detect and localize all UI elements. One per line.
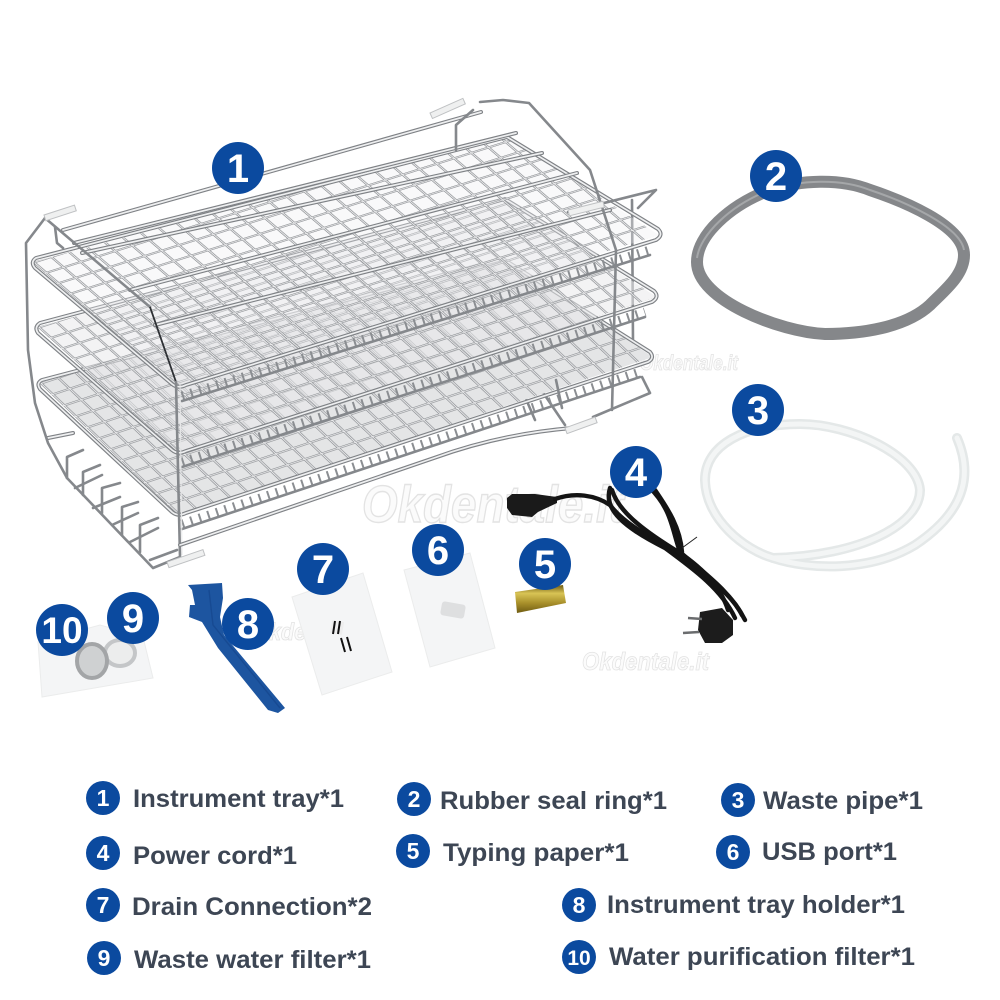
- legend item 4: Power cord*1: [133, 842, 297, 870]
- badge 8: 8: [237, 603, 259, 647]
- legend item 9: Waste water filter*1: [134, 946, 371, 974]
- legend item 4: [86, 836, 297, 870]
- watermark: right of tray: Okdentale.it: [640, 352, 739, 375]
- instrument tray: wire rack: [26, 98, 661, 568]
- long top rods: [63, 112, 610, 325]
- legend item 2: 2: [408, 786, 420, 812]
- power cord: [507, 488, 745, 643]
- watermark: large: Okdentale.it: [362, 476, 626, 534]
- lower tray mesh: [38, 259, 653, 529]
- USB port bag: [404, 553, 495, 667]
- badge 3: 3: [747, 389, 769, 433]
- cable bundle: [555, 488, 745, 620]
- waste pipe: [705, 424, 964, 566]
- rubber seal ring: [697, 182, 964, 334]
- legend item 6: USB port*1: [762, 838, 897, 866]
- legend item 4: 4: [97, 840, 110, 866]
- badge 10: [36, 604, 88, 656]
- white wire clips: [44, 98, 604, 568]
- legend item 1: Instrument tray*1: [133, 785, 344, 813]
- badge 10: 10: [41, 610, 83, 651]
- legend item 6: [716, 835, 897, 869]
- badge 6: [412, 524, 464, 576]
- badge 7: [297, 543, 349, 595]
- legend item 3: 3: [732, 787, 744, 813]
- badge 1: [212, 142, 264, 194]
- legend item 6: 6: [727, 839, 739, 865]
- legend item 7: Drain Connection*2: [132, 893, 372, 921]
- legend item 10: Water purification filter*1: [609, 943, 915, 971]
- legend item 9: [87, 941, 371, 975]
- watermark: centre left: Okdentale.it: [252, 619, 377, 646]
- watermark: lower right: Okdentale.it: [582, 648, 710, 676]
- badge 1: 1: [227, 147, 249, 191]
- legend item 2: [397, 782, 667, 816]
- badge 2: [750, 150, 802, 202]
- badge 8: [222, 598, 274, 650]
- middle tray mesh: [36, 199, 657, 467]
- legend item 5: Typing paper*1: [443, 839, 629, 867]
- legend item 5: [396, 834, 629, 868]
- badge 5: 5: [534, 543, 556, 587]
- badge 5: [519, 538, 571, 590]
- legend item 7: 7: [97, 892, 109, 918]
- instrument tray holder: [188, 583, 285, 713]
- legend item 8: 8: [573, 892, 586, 918]
- badge 2: 2: [765, 155, 787, 199]
- schuko plug: [698, 608, 733, 643]
- legend item 3: Waste pipe*1: [763, 787, 923, 815]
- badge 6: 6: [427, 529, 449, 573]
- legend item 10: 10: [567, 947, 591, 970]
- badge 9: 9: [122, 597, 144, 641]
- legend item 1: 1: [97, 785, 110, 811]
- badge 4: 4: [625, 451, 648, 495]
- badge 4: [610, 446, 662, 498]
- drain connection bag: [292, 573, 392, 695]
- legend item 2: Rubber seal ring*1: [440, 787, 667, 815]
- frame wires: [26, 100, 656, 568]
- badge 3: [732, 384, 784, 436]
- legend item 10: [562, 940, 915, 974]
- badge 9: [107, 592, 159, 644]
- filters bag: [38, 625, 153, 697]
- upper tray mesh: [32, 137, 661, 401]
- legend item 3: [721, 783, 923, 817]
- legend item 1: [86, 781, 344, 815]
- rear post: [520, 200, 633, 425]
- typing paper roll: [515, 585, 566, 613]
- IEC plug: [507, 494, 557, 517]
- legend item 8: Instrument tray holder*1: [607, 891, 905, 919]
- legend item 5: 5: [407, 838, 420, 864]
- legend item 8: [562, 888, 905, 922]
- legend item 7: [86, 888, 372, 922]
- badge 7: 7: [312, 548, 334, 592]
- legend item 9: 9: [98, 945, 110, 971]
- bottom prongs: [48, 433, 177, 560]
- legend: [86, 781, 923, 975]
